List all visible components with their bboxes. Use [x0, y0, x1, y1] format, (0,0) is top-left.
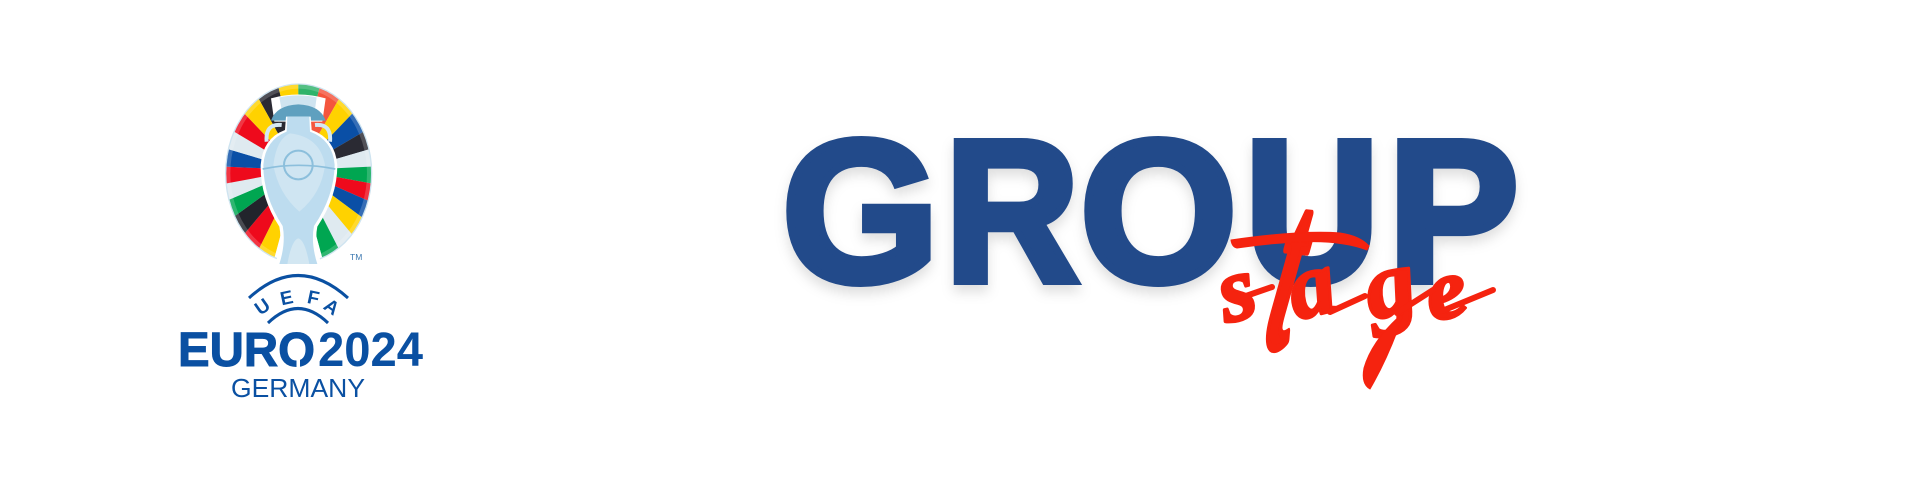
colour wedges — [226, 84, 371, 258]
UEFA arcs — [249, 276, 348, 323]
UEFA letters: F — [305, 287, 321, 310]
flourish: t crossbar — [1231, 232, 1369, 250]
EURO O notch — [296, 354, 300, 368]
flourish: script connectors — [1243, 287, 1493, 313]
heading: stage script — [1205, 136, 1493, 400]
heading: GROUP: O — [1080, 98, 1237, 324]
trophy handles — [267, 125, 330, 142]
trophy body — [261, 117, 337, 264]
trophy cup collar — [271, 94, 326, 122]
heading: stage script: s — [1205, 235, 1266, 343]
trademark: TM — [350, 252, 362, 262]
EURO wordmark: EURO — [178, 324, 315, 377]
heading: GROUP: R — [945, 99, 1079, 325]
logo: UEFA Euro 2024 — [178, 60, 423, 403]
heading: stage script: g — [1350, 228, 1426, 340]
icon: trophy emblem — [225, 83, 372, 264]
GERMANY: GERMANY — [231, 373, 365, 403]
heading: stage script: t — [1251, 136, 1333, 400]
heading: GROUP: U — [1245, 99, 1379, 325]
UEFA letters — [251, 287, 343, 320]
UEFA letters: A — [320, 295, 343, 320]
UEFA letters: U — [251, 295, 274, 320]
2024 wordmark: 2024 — [318, 324, 423, 377]
heading: GROUP: G — [782, 98, 939, 324]
UEFA letters: E — [278, 287, 295, 310]
heading: GROUP: P — [1388, 99, 1519, 325]
heading: GROUP — [782, 98, 1519, 325]
flourish: g descender — [1363, 313, 1403, 389]
heading: stage script: a — [1276, 229, 1345, 339]
heading: stage script: e — [1414, 240, 1476, 341]
